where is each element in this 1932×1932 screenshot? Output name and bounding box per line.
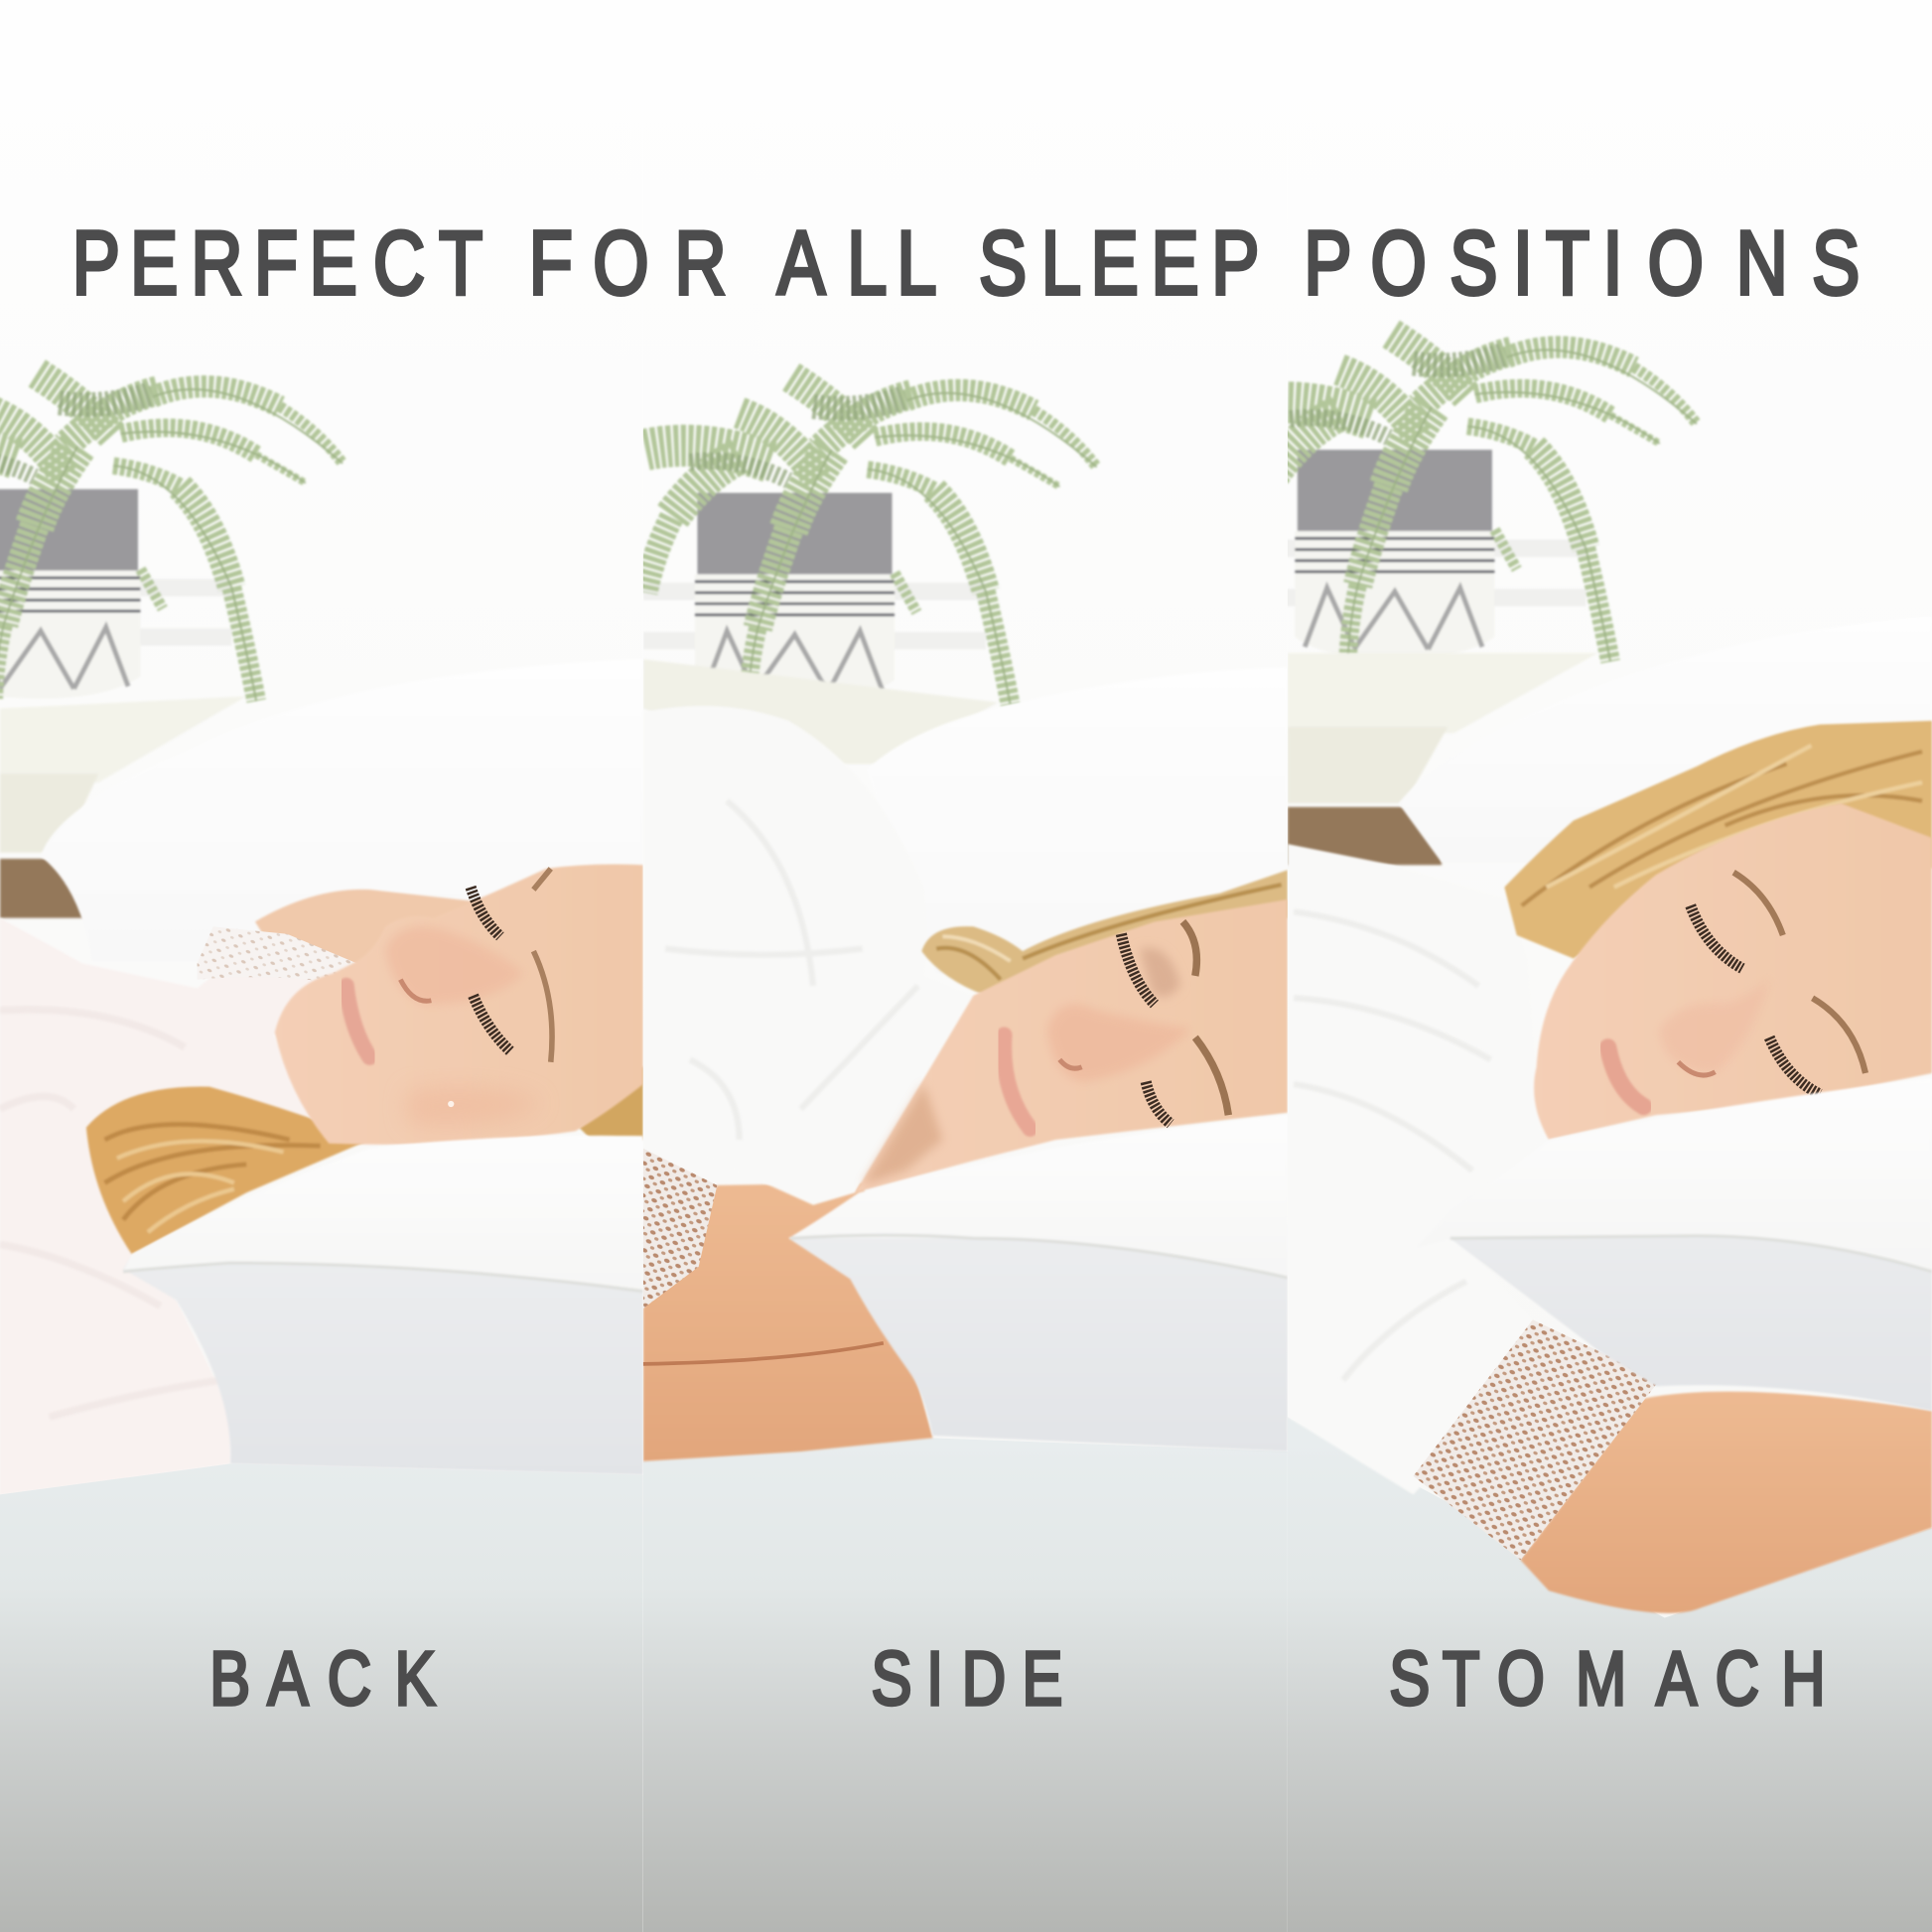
panel: back sleeper bbox=[0, 359, 643, 1932]
forearm bbox=[1520, 1392, 1932, 1613]
title: FOR bbox=[529, 213, 727, 314]
background: bright room bbox=[0, 0, 643, 1932]
forearm bbox=[643, 1182, 932, 1461]
plant in pot bbox=[1243, 334, 1697, 661]
hair bbox=[921, 870, 1288, 996]
books and table bbox=[1288, 653, 1598, 865]
front pillow bbox=[1417, 1078, 1932, 1411]
rear pillow bbox=[42, 806, 85, 919]
rear pillow bbox=[1400, 787, 1444, 864]
background: bright room bbox=[936, 1438, 1042, 1442]
book stack bbox=[643, 659, 998, 763]
blouse bbox=[1288, 844, 1660, 1560]
hair bbox=[1504, 721, 1932, 959]
label: stomach: STOMACH bbox=[1389, 1636, 1826, 1722]
books on nightstand bbox=[0, 696, 246, 918]
rear pillow bbox=[874, 702, 1021, 764]
face bbox=[1534, 803, 1932, 1140]
title: SLEEP bbox=[979, 213, 1260, 314]
arm behind head bbox=[254, 888, 475, 963]
plant in pot bbox=[643, 377, 1097, 705]
bed sheet bbox=[1288, 1417, 1932, 1932]
front pillow bbox=[123, 1136, 643, 1475]
face bbox=[855, 899, 1288, 1192]
title bbox=[72, 213, 1860, 314]
nightgown bbox=[0, 917, 355, 1422]
title: ALL bbox=[777, 213, 937, 314]
lace collar bbox=[198, 926, 357, 983]
bed sheet bbox=[0, 1463, 643, 1932]
title: POSITIONS bbox=[1304, 213, 1860, 314]
hair bbox=[86, 1066, 643, 1254]
face bbox=[275, 865, 643, 1145]
bed sheet bbox=[643, 1438, 1288, 1932]
lace cuff bbox=[1414, 1319, 1660, 1560]
label: back: BACK bbox=[209, 1636, 436, 1722]
blouse bbox=[653, 706, 919, 1206]
lace cuff bbox=[643, 1149, 717, 1309]
arm crease bbox=[643, 1343, 884, 1364]
plant in pot bbox=[0, 373, 343, 701]
background: bright room bbox=[1422, 1387, 1851, 1617]
front pillow bbox=[788, 1179, 1288, 1451]
panel: side sleeper bbox=[643, 362, 1288, 1932]
title: PERFECT bbox=[72, 213, 483, 314]
label: side: SIDE bbox=[872, 1636, 1062, 1722]
panel: stomach sleeper bbox=[1287, 320, 1932, 1932]
